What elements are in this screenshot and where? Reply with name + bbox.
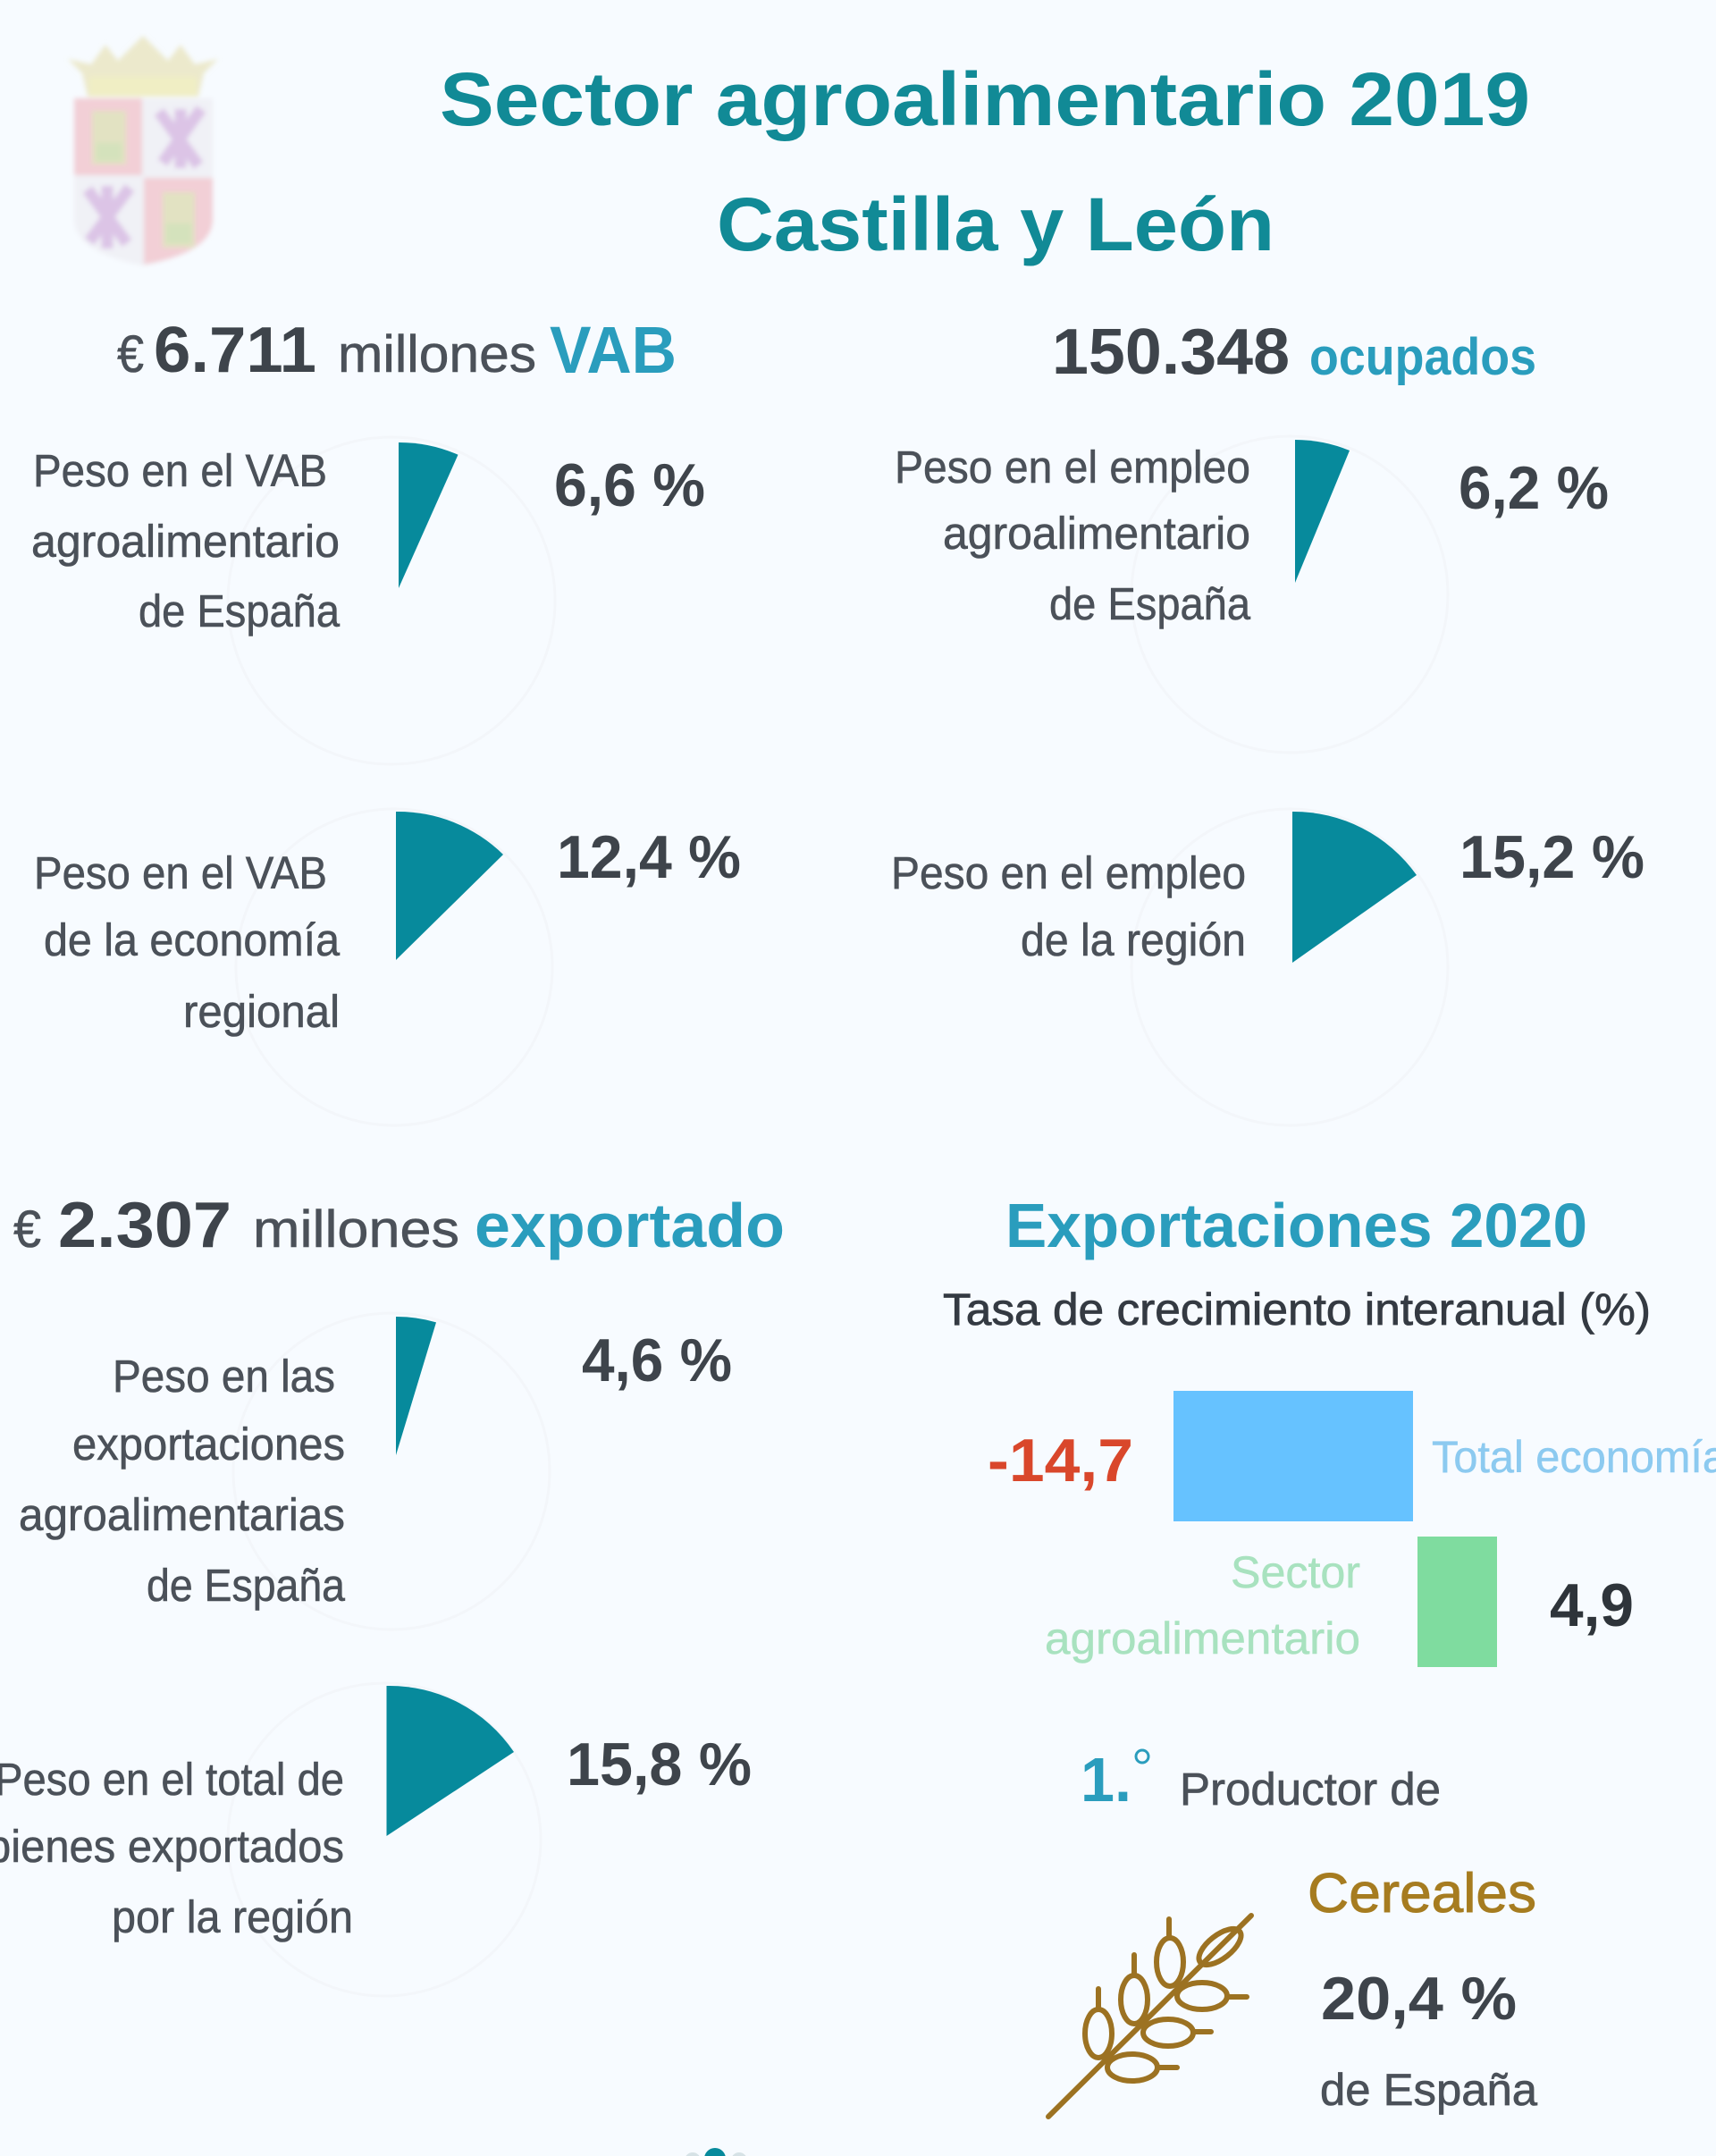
bar: total economía: -14,7 <box>988 1427 1133 1495</box>
bar chart: exportaciones 2020 <box>988 1391 1716 1667</box>
panel: peso en el empleo de España: de España <box>1049 578 1251 629</box>
panel: peso en el empleo de España: 6,2 % <box>1459 454 1609 522</box>
heading: exportado: exportado <box>475 1191 785 1260</box>
panel: peso en el VAB de la economía regional: 12,4 % <box>557 823 741 891</box>
bar: total economía <box>988 1391 1716 1521</box>
title: Sector agroalimentario 2019 <box>440 57 1530 141</box>
heading: VAB: 6.711 <box>154 315 316 386</box>
panel: peso en el empleo de la región: de la región <box>1021 914 1246 965</box>
panel: peso en las exportaciones agroalimentarias de España: de España <box>147 1560 346 1611</box>
panel: peso en el total de bienes exportados por la región: Peso en el total de <box>0 1754 344 1805</box>
title: Castilla y León <box>717 182 1274 266</box>
text: 1.º productor de: Productor de <box>1180 1764 1441 1815</box>
heading: exportado: 2.307 <box>58 1190 231 1261</box>
panel: peso en el empleo de la región <box>891 809 1644 1125</box>
panel: peso en las exportaciones agroalimentarias de España: agroalimentarias <box>19 1489 345 1540</box>
text: 20,4 % de España: 20,4 % <box>1321 1965 1517 2033</box>
panel: peso en las exportaciones agroalimentarias de España: exportaciones <box>72 1419 345 1470</box>
text: 20,4 % de España: de España <box>1320 2065 1537 2115</box>
panel: peso en el total de bienes exportados por la región: por la región <box>112 1891 353 1942</box>
panel: peso en el empleo de España <box>895 436 1609 753</box>
panel: peso en el total de bienes exportados por la región <box>0 1683 752 1996</box>
title <box>440 57 1530 266</box>
icon: wheat <box>1048 1916 1251 2117</box>
icon: coat of arms of Castilla y León <box>68 36 218 265</box>
panel: peso en el VAB de la economía regional: de la economía <box>44 914 341 965</box>
text: 1.º productor de: 1. <box>1081 1745 1131 1815</box>
panel: peso en el VAB de la economía regional <box>34 809 741 1125</box>
panel: peso en las exportaciones agroalimentarias de España: 4,6 % <box>582 1326 732 1394</box>
text: 20,4 % de España <box>1320 1965 1537 2115</box>
panel: peso en el empleo de la región: 15,2 % <box>1459 823 1644 891</box>
panel: peso en el VAB de España: de España <box>139 585 341 636</box>
subheading: tasa de crecimiento interanual: Tasa de crecimiento interanual (%) <box>943 1284 1651 1335</box>
heading: ocupados: ocupados <box>1309 328 1536 386</box>
panel: peso en el VAB de España <box>31 437 705 764</box>
heading: ocupados <box>1052 316 1536 388</box>
panel: peso en el total de bienes exportados por la región: 15,8 % <box>567 1731 752 1798</box>
heading: exportado: millones <box>253 1200 459 1259</box>
panel: peso en las exportaciones agroalimentarias de España: Peso en las <box>113 1351 335 1402</box>
panel: peso en el empleo de España: Peso en el empleo <box>895 442 1250 493</box>
panel: peso en el empleo de España: agroalimentario <box>943 508 1250 559</box>
heading: ocupados: 150.348 <box>1052 316 1290 388</box>
bar: sector agroalimentario <box>1045 1537 1634 1667</box>
panel: peso en el VAB de España: 6,6 % <box>554 451 705 519</box>
heading: VAB: millones <box>338 325 536 383</box>
panel: peso en el VAB de España: agroalimentario <box>31 516 340 567</box>
icon: clipped teal figure at bottom edge <box>685 2148 747 2156</box>
bar: sector agroalimentario: agroalimentario <box>1045 1613 1360 1663</box>
panel: peso en el VAB de España: Peso en el VAB <box>33 445 327 496</box>
panel: peso en el VAB de la economía regional: Peso en el VAB <box>34 847 327 898</box>
heading: exportado: € <box>13 1200 41 1259</box>
bar: sector agroalimentario: 4,9 <box>1550 1571 1634 1639</box>
panel: peso en el empleo de la región: Peso en el empleo <box>891 847 1246 898</box>
bar: sector agroalimentario: Sector <box>1231 1547 1360 1597</box>
heading: VAB: € <box>117 325 144 383</box>
heading: Exportaciones 2020: Exportaciones 2020 <box>1005 1191 1587 1260</box>
text: 1.º productor de <box>1081 1745 1441 1815</box>
panel: peso en el VAB de la economía regional: regional <box>183 986 340 1037</box>
heading: VAB <box>117 313 677 387</box>
text: Cereales: Cereales <box>1308 1863 1536 1924</box>
heading: exportado <box>13 1190 785 1261</box>
panel: peso en las exportaciones agroalimentarias de España <box>19 1313 732 1630</box>
heading: VAB: VAB <box>550 313 677 387</box>
